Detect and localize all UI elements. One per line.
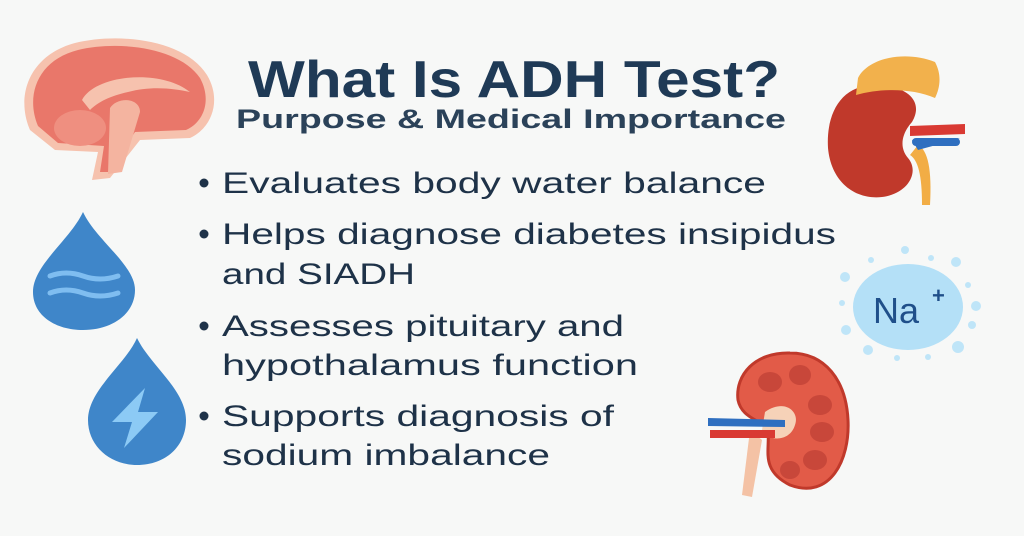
subtitle: Purpose & Medical Importance (236, 104, 786, 134)
bullet list: Evaluates body water balance (222, 167, 766, 200)
icon: water drop with lightning (88, 338, 186, 465)
icon: sodium ion: Na (873, 290, 920, 331)
title: What Is ADH Test? (248, 51, 780, 109)
bullet list: sodium imbalance (222, 439, 550, 472)
icon: brain (24, 38, 214, 180)
bullet list: hypothalamus function (222, 349, 638, 382)
icon: sodium ion (839, 246, 981, 361)
icon: water drop with waves (33, 212, 135, 330)
bullet list: Supports diagnosis of (222, 400, 615, 433)
icon: kidney with adrenal gland (828, 56, 965, 205)
icon: sodium ion: + (932, 283, 945, 308)
bullet list: and SIADH (222, 258, 415, 291)
icon: kidney cross-section (708, 353, 848, 497)
bullet list: Assesses pituitary and (222, 310, 624, 343)
bullet list: Helps diagnose diabetes insipidus (222, 218, 836, 251)
bullet list (200, 167, 836, 472)
